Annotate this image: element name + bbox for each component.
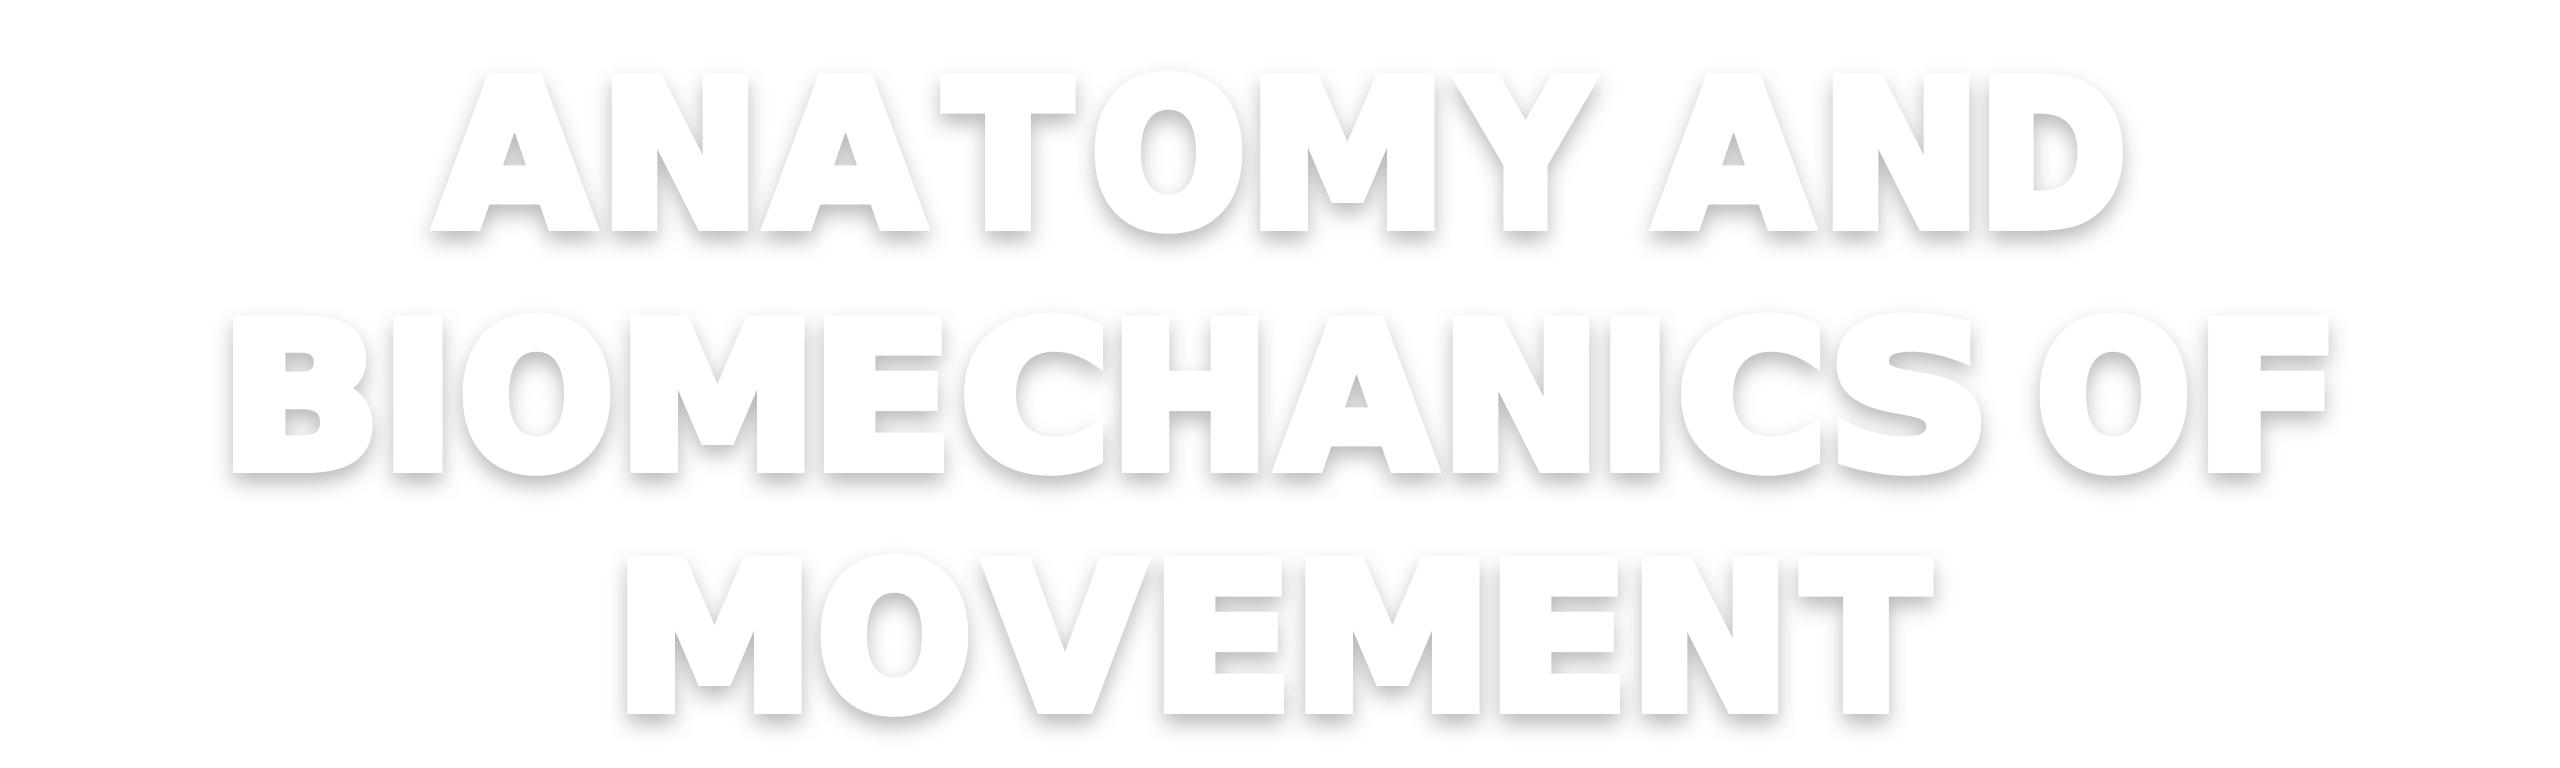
- title line 3: O: [817, 523, 972, 756]
- title line 3: M: [1293, 523, 1492, 756]
- title line 1: Y: [1459, 40, 1592, 273]
- title line 3: N: [1630, 523, 1790, 756]
- title line 3: T: [1803, 523, 1929, 756]
- title line 1: D: [1978, 40, 2127, 273]
- title line 1: A: [1656, 40, 1811, 273]
- title line 2: E: [811, 282, 953, 515]
- title line 1: M: [1248, 40, 1447, 273]
- title line 2: B: [220, 282, 381, 515]
- title line 3: E: [1487, 523, 1629, 756]
- title line 3: M: [615, 523, 814, 756]
- title line 3: E: [1151, 523, 1293, 756]
- title line 2: I: [1598, 282, 1672, 515]
- title line 1: T: [945, 40, 1071, 273]
- title line 2: A: [1279, 282, 1434, 515]
- title line 3: V: [986, 523, 1144, 756]
- title line 1: N: [1821, 40, 1981, 273]
- title line 2: F: [2195, 282, 2340, 515]
- title line 1: N: [600, 40, 760, 273]
- title line 2: I: [381, 282, 455, 515]
- title line 1: A: [437, 40, 592, 273]
- title line 2: N: [1441, 282, 1601, 515]
- title line 1: A: [768, 40, 923, 273]
- title line 2: C: [1677, 282, 1827, 515]
- title line 2: S: [1827, 282, 1991, 515]
- title line 2: H: [1110, 282, 1270, 515]
- title line 2: O: [2036, 282, 2191, 515]
- title line 2: C: [960, 282, 1110, 515]
- title: [220, 40, 2340, 756]
- title line 1: O: [1091, 40, 1246, 273]
- title line 2: M: [618, 282, 817, 515]
- title line 2: O: [459, 282, 614, 515]
